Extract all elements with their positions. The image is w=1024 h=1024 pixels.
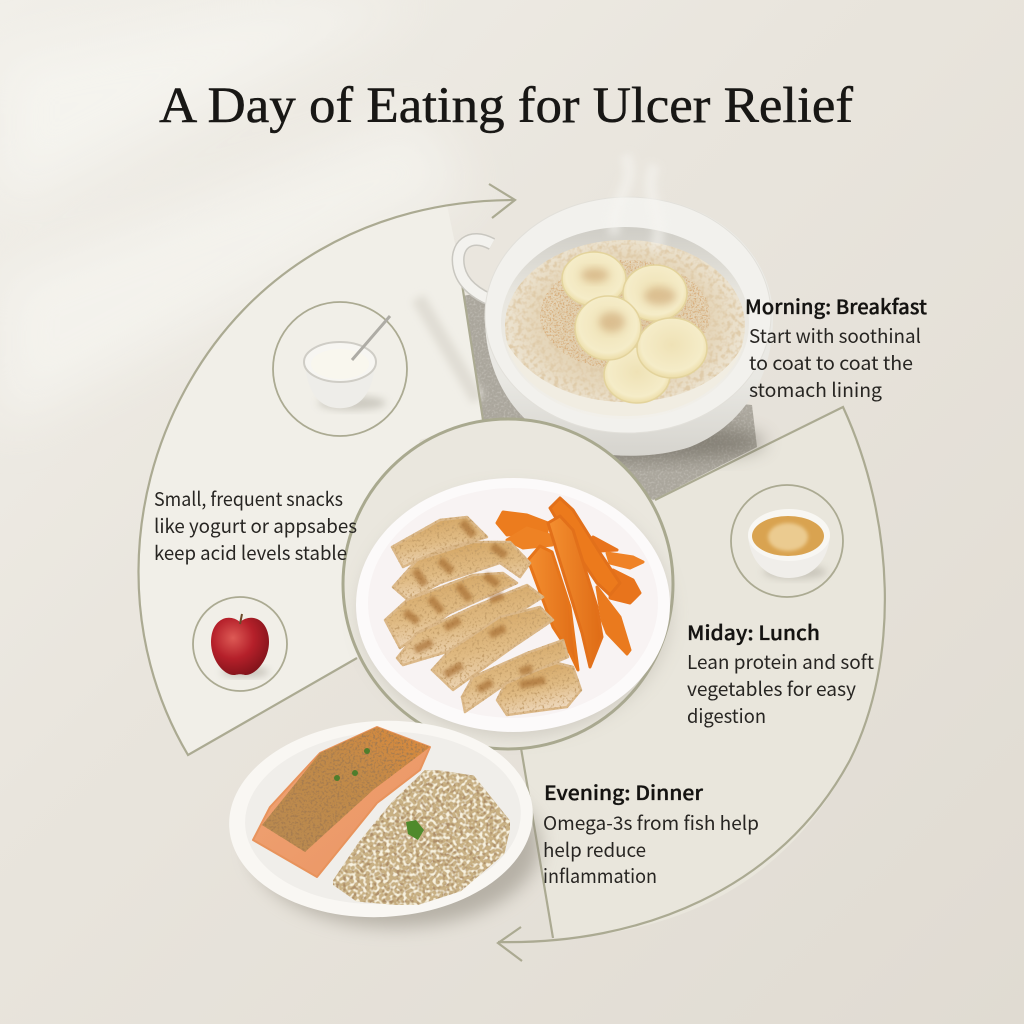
chicken slices [385, 517, 581, 715]
icon: yogurt cup [273, 302, 407, 436]
title: A Day of Eating for Ulcer Relief [159, 78, 853, 134]
circle ring [273, 302, 407, 436]
milk edge [505, 340, 745, 416]
apple body [211, 618, 269, 675]
carrot [593, 537, 617, 551]
soft shadow beside napkin [418, 298, 478, 400]
carrot [497, 512, 548, 535]
cinnamon on bananas [581, 268, 676, 332]
cup [305, 358, 375, 408]
apple stem [240, 614, 242, 624]
carrot [610, 570, 640, 603]
arrow: lunch to dinner [498, 407, 885, 961]
dust [644, 287, 676, 305]
body: breakfast [749, 322, 921, 403]
circle ring [193, 597, 287, 691]
heading: dinner: Evening: Dinner [544, 777, 704, 806]
cycle arrows [138, 184, 885, 961]
banana slice [562, 252, 626, 306]
oatmeal [505, 240, 745, 412]
apple shadow [221, 667, 269, 677]
bowl shadow [763, 565, 827, 579]
banana slice [637, 318, 707, 378]
carrots [497, 498, 643, 670]
bowl rim [485, 197, 771, 433]
chicken slice [432, 607, 553, 690]
centre circle [343, 419, 673, 749]
herb [352, 770, 358, 776]
illustration: breakfast bowl of oatmeal [458, 155, 773, 460]
icon: red apple [193, 597, 287, 691]
panel: lunch and dinner sector [521, 407, 885, 938]
herb [364, 748, 370, 754]
dust [599, 312, 625, 332]
body: lunch: vegetables for easy [687, 675, 856, 702]
mug handle outline [458, 239, 496, 302]
body: dinner [543, 809, 759, 889]
sauce highlight [768, 523, 808, 551]
banana slice [575, 296, 641, 360]
applesauce [752, 516, 824, 556]
napkin under breakfast bowl [462, 290, 757, 500]
bowl shadow [515, 424, 765, 460]
text block: snacks: Small, frequent snacks [154, 485, 343, 512]
salmon [253, 727, 430, 877]
bowl [748, 536, 830, 578]
plate [224, 713, 538, 925]
divider: dinner edge [521, 748, 553, 938]
text block: snacks: like yogurt or appsabes [154, 512, 357, 539]
body: breakfast: to coat to coat the [749, 349, 913, 376]
text block: lunch [687, 617, 874, 729]
text block: breakfast [745, 291, 927, 403]
bowl body [485, 197, 773, 456]
body: breakfast: Start with soothinal [749, 322, 921, 349]
arrow: snacks to breakfast [138, 184, 515, 755]
body: lunch: Lean protein and soft [687, 648, 874, 675]
carrot [548, 516, 602, 667]
cup shadow [318, 396, 386, 410]
herb on quinoa [406, 820, 424, 840]
chicken slice [397, 585, 543, 665]
banana slice [623, 265, 687, 321]
grill marks [405, 522, 545, 690]
bowl rim [748, 509, 830, 561]
dust [581, 268, 609, 282]
body: dinner: Omega-3s from fish help [543, 809, 759, 836]
bowl inner [501, 227, 749, 419]
quinoa [333, 770, 510, 905]
text block: dinner [543, 777, 759, 889]
salmon crust [262, 727, 430, 852]
circle ring [731, 485, 843, 597]
panel: snacks sector [138, 205, 483, 755]
plate [356, 478, 670, 732]
body: breakfast: stomach lining [749, 376, 882, 403]
plate shadow [360, 488, 670, 736]
carrot [507, 528, 552, 548]
chicken slice [385, 573, 517, 648]
plate well [241, 725, 525, 911]
plate shadow [250, 763, 540, 927]
heading: lunch: Miday: Lunch [687, 617, 820, 646]
text block: snacks [154, 485, 357, 566]
banana slices [562, 252, 707, 403]
icon: applesauce bowl [731, 485, 843, 597]
carrot [597, 587, 630, 654]
herbs on salmon [334, 748, 370, 781]
chicken slice [392, 517, 487, 567]
body: dinner: help reduce [543, 836, 646, 863]
carrot [550, 498, 620, 595]
steam [614, 155, 659, 250]
yogurt [311, 349, 369, 379]
illustration: dinner plate of salmon and quinoa [224, 713, 540, 927]
divider: breakfast edge [458, 258, 483, 420]
body: dinner: inflammation [543, 862, 657, 889]
plate well [368, 488, 658, 718]
herb [334, 775, 340, 781]
body: lunch [687, 648, 874, 729]
banana slice [604, 347, 670, 403]
heading: breakfast: Morning: Breakfast [745, 291, 927, 320]
carrot [607, 553, 643, 568]
mug handle [458, 239, 496, 302]
illustration: lunch plate in centre circle [343, 419, 673, 749]
chicken slice [497, 663, 581, 715]
spoon [352, 316, 390, 360]
chicken slice [393, 542, 530, 600]
body: lunch: digestion [687, 702, 766, 729]
chicken slice [462, 640, 568, 712]
cup rim [304, 342, 376, 382]
text block: snacks: keep acid levels stable [154, 539, 347, 566]
cinnamon [540, 260, 710, 370]
carrot [528, 546, 578, 670]
